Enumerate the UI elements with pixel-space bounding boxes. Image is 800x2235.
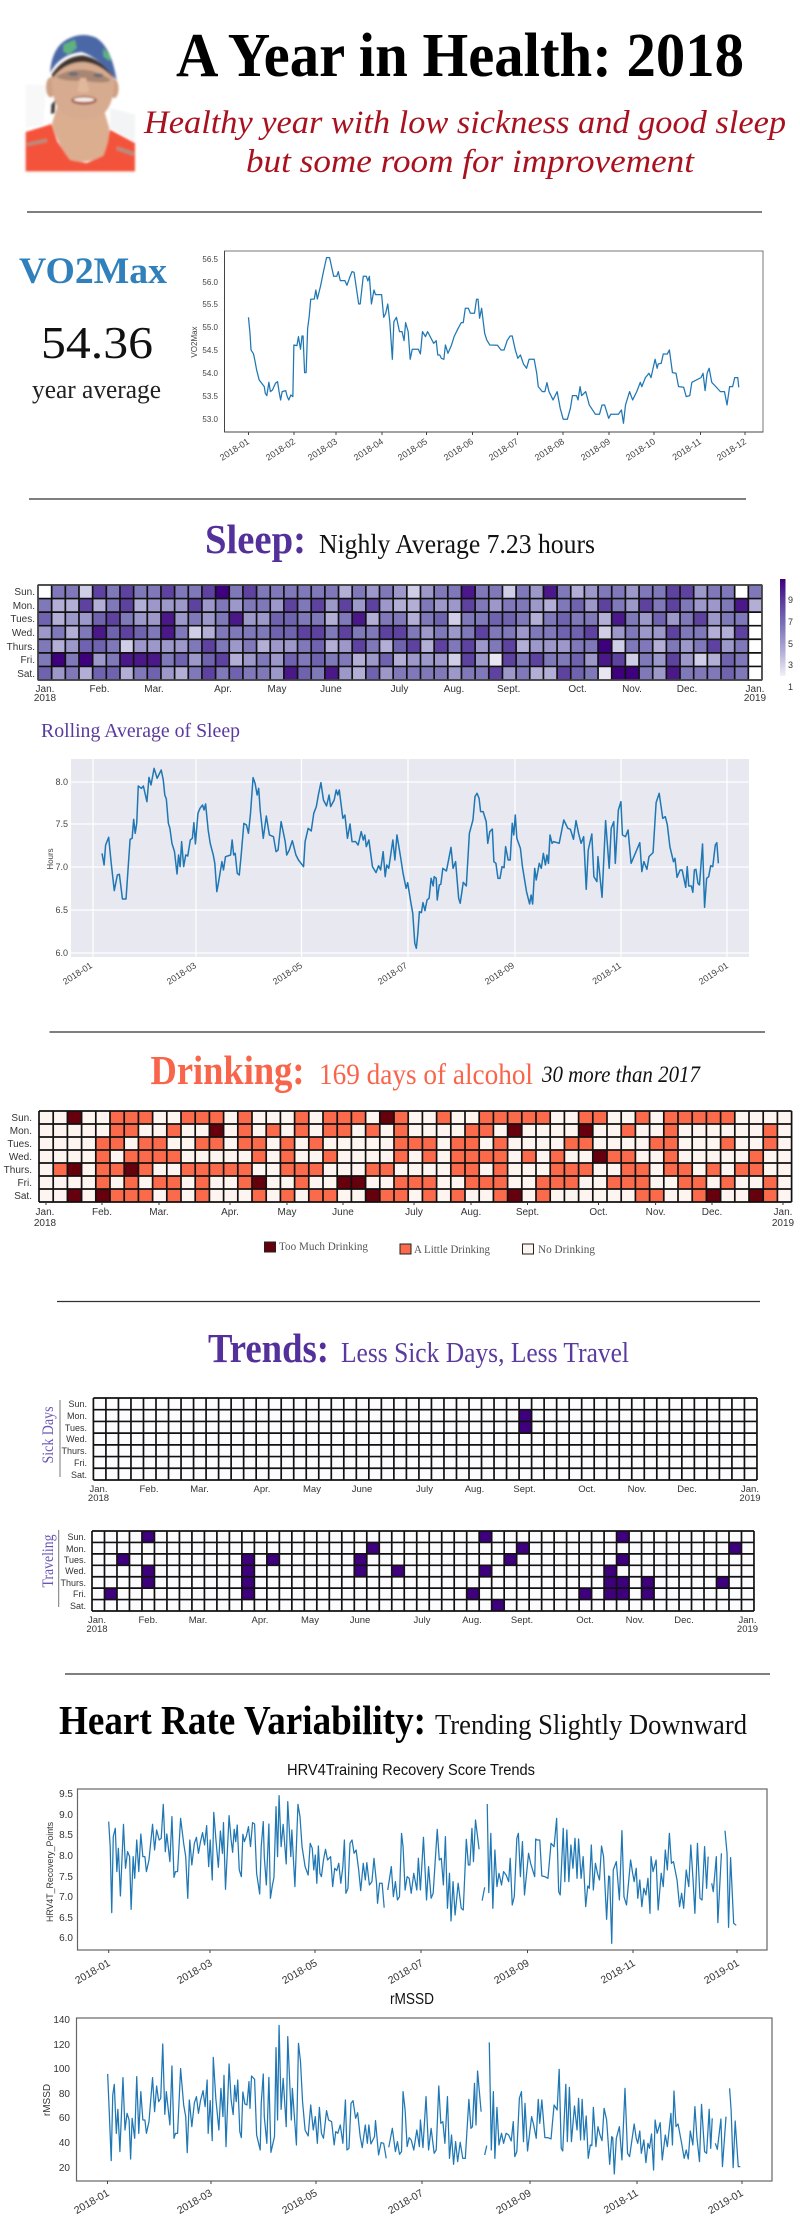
chart: HRV4Training recovery score: HRV4T_Recovery_Points — [45, 1822, 56, 1922]
chart: rolling average of sleep: 2018-01 — [61, 960, 94, 987]
chart: rMSSD: 2018-05 — [280, 2187, 320, 2217]
heatmap: traveling calendar: 2019 — [737, 1624, 758, 1635]
heading: Drinking — [150, 1047, 701, 1093]
heatmap: sick days calendar: Sick Days — [40, 1406, 57, 1464]
heatmap: sick days calendar: Mar. — [190, 1484, 209, 1495]
chart: HRV4Training recovery score: 7.5 — [59, 1872, 73, 1883]
heading: Rolling Average of Sleep: Rolling Average of Sleep — [41, 720, 240, 742]
heatmap: drinking calendar: Dec. — [702, 1207, 722, 1218]
heading: Sleep — [205, 516, 595, 562]
heatmap: sick days calendar: Fri. — [74, 1458, 87, 1468]
chart: VO2Max line chart: 2018-10 — [624, 436, 657, 463]
heatmap: sick days calendar: Dec. — [677, 1484, 697, 1495]
heatmap: traveling calendar: Feb. — [138, 1615, 158, 1626]
chart: rMSSD: rMSSD — [390, 1991, 434, 2008]
heatmap: nightly sleep calendar: June — [320, 684, 342, 695]
heatmap: sick days calendar: Apr. — [254, 1484, 270, 1495]
heatmap: drinking calendar: Oct. — [589, 1207, 608, 1218]
chart: rMSSD: 2018-07 — [386, 2187, 426, 2217]
heatmap: sick days calendar — [40, 1398, 761, 1504]
heatmap: sick days calendar: 2018 — [88, 1493, 109, 1504]
chart: VO2Max line chart: VO2Max — [190, 326, 199, 358]
heatmap: traveling calendar: Thurs. — [60, 1578, 86, 1588]
heatmap: sick days calendar: Jan. — [741, 1484, 759, 1495]
heatmap: nightly sleep calendar: Dec. — [677, 684, 697, 695]
heatmap: sick days calendar: Sun. — [68, 1399, 87, 1409]
chart: HRV4Training recovery score: 2018-03 — [175, 1957, 215, 1987]
chart: VO2Max line chart: 54.5 — [202, 346, 219, 355]
heatmap: nightly sleep calendar: Tues. — [10, 614, 35, 625]
heatmap: drinking calendar: Apr. — [221, 1207, 239, 1218]
heatmap: traveling calendar: May — [301, 1615, 319, 1626]
heatmap: nightly sleep calendar: Mar. — [144, 684, 164, 695]
chart: HRV4Training recovery score: 2018-09 — [492, 1957, 532, 1987]
heatmap: traveling calendar: Apr. — [252, 1615, 268, 1626]
heatmap: sick days calendar: May — [303, 1484, 321, 1495]
heatmap: traveling calendar: Nov. — [626, 1615, 644, 1626]
subtitle — [143, 105, 786, 180]
chart: VO2Max line chart: 2018-06 — [442, 436, 475, 463]
heatmap: sick days calendar: Nov. — [628, 1484, 646, 1495]
heatmap: traveling calendar: Wed. — [65, 1566, 86, 1576]
chart: VO2Max line chart: 54.0 — [202, 369, 219, 378]
chart: HRV4Training recovery score: 2018-01 — [73, 1957, 113, 1987]
chart: rolling average of sleep: 2018-11 — [590, 960, 623, 986]
heatmap: drinking calendar: Sun. — [11, 1113, 32, 1124]
heatmap: sick days calendar: Oct. — [578, 1484, 596, 1495]
heatmap: drinking calendar: Nov. — [646, 1207, 666, 1218]
heatmap: sick days calendar: Tues. — [65, 1423, 87, 1433]
heatmap: sick days calendar: Sept. — [513, 1484, 536, 1495]
heatmap: nightly sleep calendar: Fri. — [21, 655, 35, 666]
heatmap: traveling calendar: Traveling — [40, 1534, 57, 1588]
heatmap: traveling calendar: Sept. — [511, 1615, 533, 1626]
heatmap: drinking calendar: July — [405, 1207, 423, 1218]
chart: HRV4Training recovery score: 2018-11 — [599, 1957, 638, 1986]
heatmap: traveling calendar: Jan. — [88, 1615, 106, 1626]
chart: VO2Max line chart: 2018-05 — [396, 436, 429, 463]
chart: rolling average of sleep: 2018-05 — [271, 960, 304, 987]
heatmap: drinking calendar: Wed. — [9, 1152, 32, 1163]
chart: rolling average of sleep: 7.0 — [55, 862, 68, 872]
chart: VO2Max line chart — [190, 251, 763, 463]
chart: rMSSD: 2018-03 — [175, 2187, 215, 2217]
heatmap: traveling calendar: Oct. — [576, 1615, 594, 1626]
legend: sleep colour bar: 7 — [788, 617, 793, 627]
heatmap: nightly sleep calendar: Wed. — [12, 628, 35, 639]
heatmap: traveling calendar — [40, 1530, 758, 1635]
heatmap: sick days calendar: 2019 — [739, 1493, 761, 1504]
heatmap: nightly sleep calendar — [7, 585, 767, 704]
heading: Sleep: Nighly Average 7.23 hours — [319, 529, 595, 559]
heatmap: nightly sleep calendar: 2019 — [744, 693, 767, 704]
heatmap: traveling calendar: Sat. — [70, 1601, 86, 1611]
heatmap: nightly sleep calendar: Sept. — [497, 684, 520, 695]
chart: rMSSD: 20 — [59, 2163, 70, 2174]
chart: VO2Max line chart: 2018-08 — [533, 436, 566, 463]
chart: rolling average of sleep: 2018-09 — [483, 960, 516, 987]
heatmap: sick days calendar: July — [416, 1484, 433, 1495]
legend: sleep colour bar: 1 — [788, 682, 793, 692]
heading: VO2Max: VO2Max — [19, 251, 168, 292]
heatmap: nightly sleep calendar: Aug. — [444, 684, 464, 695]
heatmap: traveling calendar: Dec. — [674, 1615, 694, 1626]
chart: VO2Max line chart: 55.0 — [202, 323, 219, 332]
heatmap: drinking calendar: June — [332, 1207, 354, 1218]
chart: VO2Max line chart: 2018-09 — [579, 436, 612, 463]
chart: VO2Max line chart: 53.5 — [202, 392, 219, 401]
heatmap: traveling calendar: Jan. — [739, 1615, 756, 1626]
heatmap: nightly sleep calendar: Sun. — [14, 587, 35, 598]
heatmap: drinking calendar: Mar. — [149, 1207, 169, 1218]
heatmap: nightly sleep calendar: Mon. — [13, 601, 35, 612]
heatmap: drinking calendar: Mon. — [10, 1126, 32, 1137]
heatmap: traveling calendar: 2018 — [86, 1624, 108, 1635]
icon: portrait photo — [26, 35, 135, 171]
chart: VO2Max line chart: 2018-04 — [352, 436, 385, 463]
heatmap: nightly sleep calendar: Oct. — [568, 684, 587, 695]
chart: VO2Max line chart: 53.0 — [202, 415, 219, 424]
heading: Trends: Less Sick Days, Less Travel — [341, 1338, 629, 1369]
chart: rolling average of sleep: Hours — [46, 848, 55, 870]
heatmap: nightly sleep calendar: Thurs. — [7, 642, 35, 653]
heading: Heart Rate Variability — [59, 1697, 747, 1743]
chart: rMSSD: 120 — [53, 2040, 70, 2051]
heatmap: drinking calendar: Jan. — [36, 1207, 54, 1218]
chart: rolling average of sleep: 2018-07 — [376, 960, 409, 987]
heading: Trends — [208, 1325, 629, 1371]
heatmap: sick days calendar: Jan. — [90, 1484, 107, 1495]
chart: rolling average of sleep: 8.0 — [55, 777, 68, 787]
chart: HRV4Training recovery score: 6.5 — [59, 1913, 73, 1924]
heatmap: nightly sleep calendar: May — [268, 684, 286, 695]
chart: rolling average of sleep — [46, 759, 749, 987]
heatmap: nightly sleep calendar: Feb. — [89, 684, 110, 695]
chart: rMSSD: 2018-11 — [602, 2187, 641, 2216]
chart: HRV4Training recovery score: 6.0 — [59, 1933, 73, 1944]
legend: sleep colour bar: 3 — [788, 660, 793, 670]
heatmap: nightly sleep calendar: July — [391, 684, 408, 695]
chart: HRV4Training recovery score: 8.5 — [59, 1830, 73, 1841]
heatmap: traveling calendar: Mon. — [66, 1544, 86, 1554]
panel: VO2Max summary — [19, 251, 168, 404]
chart: VO2Max line chart: 56.0 — [202, 278, 219, 287]
heatmap: traveling calendar: Mar. — [189, 1615, 207, 1626]
heatmap: nightly sleep calendar: Sat. — [17, 669, 35, 680]
chart: HRV4Training recovery score — [45, 1762, 767, 1987]
heatmap: traveling calendar: June — [350, 1615, 370, 1626]
heatmap: drinking calendar: Fri. — [18, 1178, 32, 1189]
chart: VO2Max line chart: 2018-11 — [670, 436, 703, 462]
chart: rolling average of sleep: 6.5 — [55, 905, 68, 915]
chart: HRV4Training recovery score: 2018-07 — [386, 1957, 426, 1987]
chart: VO2Max line chart: 2018-02 — [264, 436, 297, 463]
chart: VO2Max line chart: 55.5 — [202, 300, 219, 309]
chart: rolling average of sleep: 7.5 — [55, 819, 68, 829]
chart: rMSSD: 2018-01 — [72, 2187, 112, 2217]
heading: Drinking: Drinking: — [150, 1047, 304, 1093]
chart: rMSSD: 2019-01 — [706, 2187, 746, 2217]
heatmap: sick days calendar: Sat. — [71, 1470, 87, 1480]
chart: VO2Max line chart: 2018-12 — [715, 436, 748, 463]
caption: year average: year average — [32, 375, 161, 404]
heatmap: nightly sleep calendar: Jan. — [746, 684, 764, 695]
heatmap: traveling calendar: July — [414, 1615, 431, 1626]
heatmap: sick days calendar: Aug. — [465, 1484, 484, 1495]
heatmap: sick days calendar: Thurs. — [61, 1446, 87, 1456]
heatmap: sick days calendar: June — [352, 1484, 372, 1495]
chart: VO2Max line chart: 2018-01 — [218, 436, 251, 463]
heatmap: drinking calendar: Tues. — [7, 1139, 32, 1150]
stat: 54.36: 54.36 — [41, 317, 153, 368]
heading: Heart Rate Variability: Heart Rate Variability: — [59, 1697, 426, 1743]
chart: rMSSD: rMSSD — [42, 2084, 53, 2116]
legend: sleep colour bar — [780, 579, 793, 692]
heatmap: nightly sleep calendar: Apr. — [214, 684, 232, 695]
chart: rolling average of sleep: 2019-01 — [697, 960, 730, 987]
chart: HRV4Training recovery score: 9.0 — [59, 1810, 73, 1821]
heatmap: traveling calendar: Fri. — [73, 1589, 86, 1599]
subtitle: but some room for improvement — [246, 144, 695, 180]
heatmap: sick days calendar: Wed. — [66, 1434, 87, 1444]
heading: Trends: Trends: — [208, 1325, 329, 1371]
heatmap: traveling calendar: Sun. — [67, 1532, 86, 1542]
heatmap: nightly sleep calendar: 2018 — [34, 693, 57, 704]
chart: VO2Max line chart: 56.5 — [202, 255, 219, 264]
heatmap: drinking calendar: Thurs. — [4, 1165, 32, 1176]
chart: rMSSD: 2018-09 — [494, 2187, 534, 2217]
chart: HRV4Training recovery score: 2019-01 — [702, 1957, 742, 1987]
heatmap: traveling calendar: Aug. — [462, 1615, 482, 1626]
heading: Heart Rate Variability: Trending Slightly Downward — [435, 1710, 747, 1741]
heatmap: drinking calendar: Sept. — [516, 1207, 539, 1218]
chart: HRV4Training recovery score: 8.0 — [59, 1851, 73, 1862]
chart: HRV4Training recovery score: HRV4Training Recovery Score Trends — [287, 1762, 535, 1779]
chart: VO2Max line chart: 2018-07 — [487, 436, 520, 463]
legend item: no drinking: No Drinking — [538, 1242, 595, 1256]
chart: rMSSD: 40 — [59, 2138, 70, 2149]
legend: drinking — [264, 1239, 595, 1256]
chart: rMSSD: 100 — [53, 2064, 70, 2075]
chart: rolling average of sleep: 2018-03 — [165, 960, 198, 987]
heatmap: drinking calendar: 2019 — [772, 1218, 795, 1229]
legend: sleep colour bar: 9 — [788, 595, 793, 605]
heatmap: drinking calendar — [4, 1111, 795, 1229]
heatmap: drinking calendar: Feb. — [92, 1207, 112, 1218]
heatmap: drinking calendar: 2018 — [34, 1218, 57, 1229]
chart: rMSSD: 80 — [59, 2089, 70, 2100]
heatmap: nightly sleep calendar: Jan. — [36, 684, 54, 695]
heatmap: nightly sleep calendar: Nov. — [622, 684, 642, 695]
legend: sleep colour bar: 5 — [788, 639, 793, 649]
chart: VO2Max line chart: 2018-03 — [306, 436, 339, 463]
chart: HRV4Training recovery score: 9.5 — [59, 1789, 73, 1800]
subtitle: Healthy year with low sickness and good sleep — [143, 105, 786, 141]
heatmap: drinking calendar: Jan. — [774, 1207, 792, 1218]
chart: HRV4Training recovery score: 7.0 — [59, 1892, 73, 1903]
legend item: too much drinking: Too Much Drinking — [279, 1239, 368, 1253]
chart: rolling average of sleep: 6.0 — [55, 948, 68, 958]
chart: HRV4Training recovery score: 2018-05 — [280, 1957, 320, 1987]
heading: Drinking: 169 days of alcohol — [319, 1058, 533, 1091]
chart: rMSSD: 60 — [59, 2113, 70, 2124]
chart: rMSSD — [42, 1991, 772, 2217]
heading: Sleep: Sleep: — [205, 516, 306, 562]
heatmap: sick days calendar: Feb. — [139, 1484, 159, 1495]
heatmap: traveling calendar: Tues. — [64, 1555, 86, 1565]
heatmap: drinking calendar: Aug. — [461, 1207, 481, 1218]
heatmap: drinking calendar: May — [278, 1207, 296, 1218]
title: A Year in Health: 2018 — [176, 22, 744, 90]
heading: Drinking: 30 more than 2017 — [541, 1062, 701, 1087]
heatmap: drinking calendar: Sat. — [14, 1191, 32, 1202]
heatmap: sick days calendar: Mon. — [67, 1411, 87, 1421]
legend item: a little drinking: A Little Drinking — [414, 1242, 490, 1256]
chart: rMSSD: 140 — [53, 2015, 70, 2026]
